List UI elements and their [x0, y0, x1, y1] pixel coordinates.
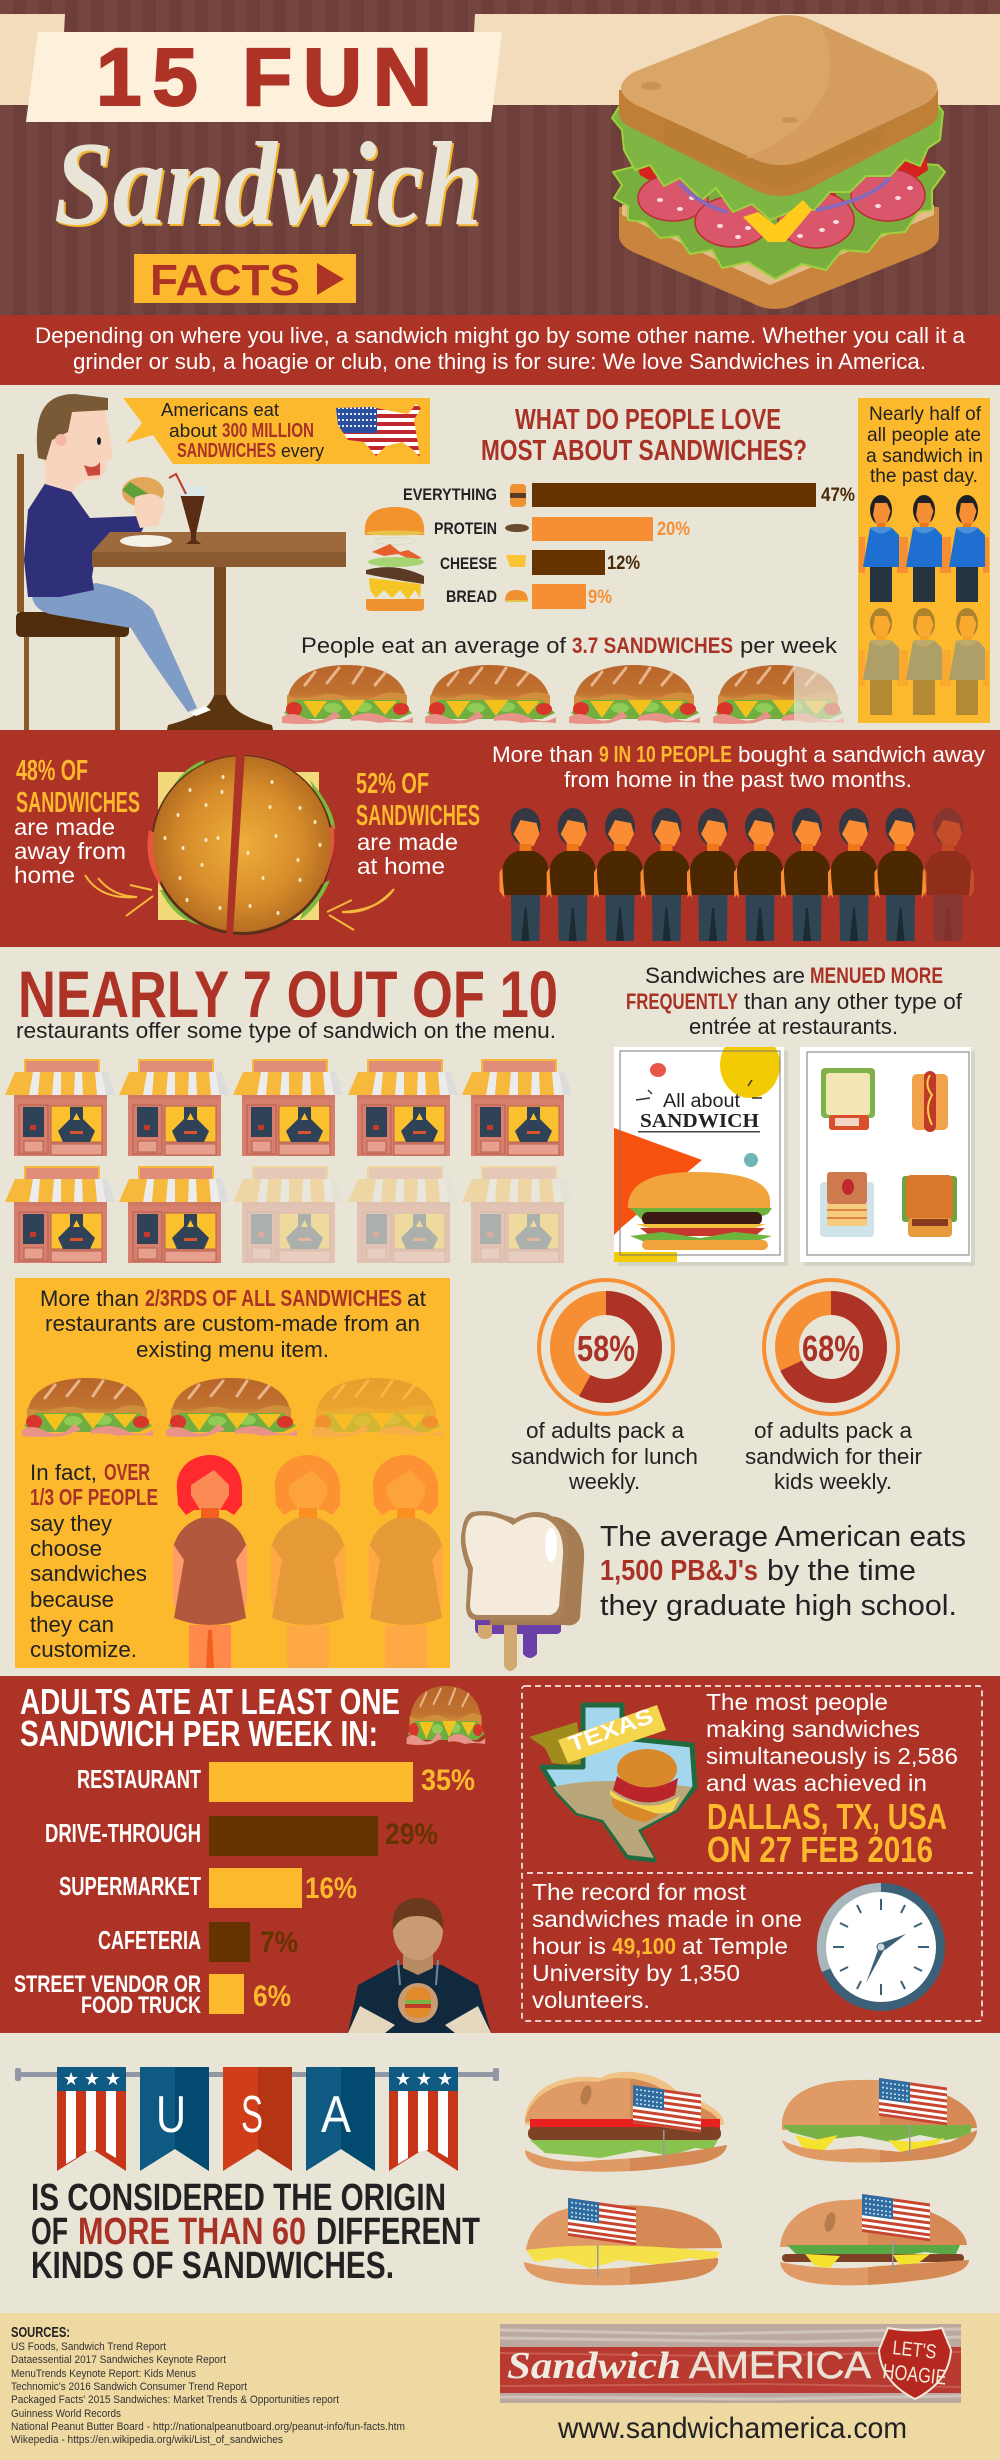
text: one third customize: 1/3 OF PEOPLE — [30, 1484, 158, 1510]
intro band: grinder or sub, a hoagie or club, one thing is for sure: We love Sandwiches in America. — [73, 349, 926, 374]
bar: cafeteria: 7% — [260, 1926, 298, 1959]
text: one third customize — [30, 1459, 158, 1662]
panel: nearly half of people — [858, 398, 990, 723]
caption: 68 percent: sandwich for their — [745, 1444, 922, 1469]
text: two thirds: at — [407, 1286, 427, 1311]
bar: everything: 47% — [821, 485, 855, 506]
text: most sandwiches record: volunteers. — [532, 1987, 650, 2013]
sources list: Packaged Facts' 2015 Sandwiches: Market Trends & Opportunities report — [11, 2394, 339, 2406]
icon: menu burger — [628, 1172, 772, 1250]
sources list: Guinness World Records — [11, 2408, 121, 2420]
illustration: man eating at table — [16, 394, 346, 735]
text: most sandwiches record — [532, 1879, 802, 2013]
text: one third customize: In fact, — [30, 1460, 97, 1485]
icon: big sandwich — [612, 15, 945, 309]
arrow: right — [327, 889, 394, 930]
icon: square sandwich — [821, 1068, 875, 1130]
caption: 58 percent: sandwich for lunch — [511, 1444, 698, 1469]
bar: cafeteria: CAFETERIA — [98, 1925, 201, 1955]
text: most sandwiches record: The record for most — [532, 1879, 747, 1905]
icon: flag burger three — [524, 2198, 722, 2285]
text: 52 percent home: are made — [357, 829, 458, 855]
text: origin of 60 sandwiches — [31, 2177, 480, 2287]
bar: restaurant: RESTAURANT — [77, 1764, 201, 1794]
text: one third customize: sandwiches — [30, 1561, 147, 1586]
bar: protein — [434, 517, 690, 541]
tomatoes — [632, 150, 928, 195]
pennant: stars left: ★★★ — [63, 2069, 121, 2089]
text: one third customize: they can — [30, 1612, 114, 1637]
sources list: US Foods, Sandwich Trend Report — [11, 2341, 166, 2353]
bar chart: what people love — [403, 483, 855, 609]
text: 3.7 sandwiches per week: 3.7 SANDWICHES — [572, 633, 733, 658]
text: 3.7 sandwiches per week — [301, 633, 838, 658]
menu card: cover — [614, 1032, 788, 1266]
icon: woman highlighted — [173, 1455, 247, 1668]
text: most sandwiches record: at Temple — [682, 1933, 788, 1959]
table top — [92, 532, 346, 567]
text: one third customize: say they — [30, 1511, 113, 1536]
pennant: stars right: ★★★ — [395, 2069, 453, 2089]
heading: adults ate — [20, 1681, 400, 1754]
text: two thirds: existing menu item. — [136, 1337, 329, 1362]
bar chart: places — [14, 1762, 475, 2019]
text: pbj fact — [600, 1521, 966, 1622]
text: pbj fact: by the time — [767, 1555, 916, 1587]
sources list: National Peanut Butter Board - http://nationalpeanutboard.org/peanut-info/fun-facts.htm — [11, 2421, 405, 2433]
burger in hand — [122, 477, 164, 507]
text: dallas date: ON 27 FEB 2016 — [707, 1829, 933, 1870]
text: 48 percent away: SANDWICHES — [16, 787, 140, 819]
text: 48 percent away: 48% OF — [16, 755, 88, 787]
icon: pbj toast — [461, 1511, 584, 1671]
icon: layered stack — [820, 1172, 874, 1237]
caption: 68 percent: kids weekly. — [774, 1469, 892, 1494]
icon: burger split — [147, 752, 335, 935]
bar: restaurant — [77, 1762, 475, 1802]
logo shield: LET'S — [891, 2337, 938, 2364]
bar: street vendor: FOOD TRUCK — [81, 1992, 202, 2019]
text: menued more frequently: entrée at restaurants. — [689, 1014, 898, 1039]
icon: exploded burger — [365, 507, 424, 611]
arrow: left — [85, 875, 153, 916]
bar: restaurant: 35% — [421, 1764, 475, 1797]
icon: texas badge: TEXAS — [565, 1703, 656, 1757]
icon: man holding burger — [348, 1898, 491, 2033]
panel: nearly half of people: a sandwich in — [866, 445, 983, 467]
header panel — [0, 0, 1000, 315]
text: most people record: The most people — [706, 1689, 888, 1715]
text: menued more frequently — [626, 963, 963, 1039]
text: most people record: and was achieved in — [706, 1770, 927, 1796]
pennant: stars left — [57, 2067, 126, 2171]
pennant: U: U — [156, 2086, 186, 2144]
text: origin of 60 sandwiches: OF — [31, 2211, 68, 2253]
sources list: Wikepedia - https://en.wikipedia.org/wiki/List_of_sandwiches — [11, 2434, 283, 2446]
title: sandwich: Sandwich — [56, 119, 484, 252]
caption: 58 percent: weekly. — [568, 1469, 640, 1494]
logo shield: HOAGIE — [881, 2360, 948, 2390]
logo: sandwich america — [500, 2324, 961, 2403]
text: origin of 60 sandwiches: MORE THAN 60 — [78, 2211, 306, 2253]
banner: usa bunting — [15, 2067, 499, 2171]
callout: 300 million sandwiches: Americans eat — [161, 399, 279, 420]
text: 48 percent away: away from — [14, 838, 126, 864]
faded people row — [859, 608, 989, 715]
facts tag: FACTS — [150, 256, 300, 305]
icons: nine of ten people — [500, 808, 974, 941]
torso — [24, 482, 145, 597]
text: menued more frequently: than any other type of — [744, 989, 963, 1014]
icon: us flag map — [336, 404, 421, 458]
table pedestal — [214, 567, 226, 700]
icon: flag burger one — [525, 2072, 727, 2172]
upper lettuce — [612, 105, 943, 220]
lower lettuce — [613, 150, 945, 279]
callout: 300 million sandwiches — [123, 398, 430, 464]
chair — [17, 454, 120, 733]
heading: what do people love: WHAT DO PEOPLE LOVE — [515, 404, 781, 436]
text: most sandwiches record: 49,100 — [612, 1933, 676, 1959]
caption: 68 percent — [745, 1418, 922, 1494]
title: 15 fun: 15 FUN — [96, 32, 432, 123]
heading: nearly 7 out of 10: restaurants offer some type of sandwich on the menu. — [16, 1018, 556, 1043]
pennant: U — [140, 2067, 209, 2171]
text: most sandwiches record: University by 1,350 — [532, 1960, 740, 1986]
text: menued more frequently: Sandwiches are — [645, 963, 805, 988]
heading: nearly 7 out of 10: NEARLY 7 OUT OF 10 — [18, 957, 558, 1031]
text: 52 percent home: 52% OF — [356, 768, 429, 800]
icons: subs two of three — [22, 1378, 442, 1437]
bar: drive through — [45, 1816, 438, 1856]
people row — [859, 495, 989, 602]
bar: everything — [403, 483, 855, 507]
heading: adults ate: ADULTS ATE AT LEAST ONE — [20, 1681, 400, 1722]
bar: bread — [446, 584, 612, 609]
icons: restaurants — [5, 1060, 572, 1263]
text: pbj fact: The average American eats — [600, 1521, 966, 1553]
head — [44, 405, 113, 492]
text: one third customize: OVER — [104, 1459, 150, 1485]
logo: sandwich america: AMERICA — [689, 2345, 872, 2387]
text: 52 percent home: SANDWICHES — [356, 800, 480, 832]
bar: cafeteria — [98, 1922, 298, 1962]
footer panel — [0, 2313, 1000, 2460]
legs — [32, 583, 197, 712]
menu card: cover: All about — [663, 1091, 741, 1112]
heading: adults ate: SANDWICH PER WEEK IN: — [20, 1713, 378, 1754]
text: 9 in 10 people — [492, 741, 985, 792]
bar: cheese: 12% — [607, 553, 640, 574]
sources list — [11, 2324, 405, 2446]
text: 3.7 sandwiches per week: per week — [740, 633, 838, 658]
text: menued more frequently: FREQUENTLY — [626, 989, 738, 1014]
bar: street vendor: STREET VENDOR OR — [14, 1971, 201, 1998]
icon: hot dog — [912, 1071, 948, 1132]
text: origin of 60 sandwiches: KINDS OF SANDWICHES. — [31, 2245, 394, 2287]
logo: sandwich america: Sandwich — [507, 2345, 681, 2387]
donut chart: 58 percent — [539, 1280, 673, 1414]
heading: what do people love: MOST ABOUT SANDWICHES? — [481, 435, 807, 467]
onion — [679, 178, 890, 212]
panel: nearly half of people: all people ate — [867, 424, 981, 446]
bar: supermarket: 16% — [305, 1872, 357, 1905]
text: menued more frequently: MENUED MORE — [810, 963, 943, 988]
bar: drive through: DRIVE-THROUGH — [45, 1818, 201, 1848]
text: 48 percent away: home — [14, 862, 75, 888]
bar: protein: 20% — [657, 519, 690, 540]
title box — [26, 32, 502, 122]
text: one third customize: because — [30, 1587, 114, 1612]
callout: 300 million sandwiches: about — [169, 420, 217, 441]
sources list: Technomic's 2016 Sandwich Consumer Trend Report — [11, 2381, 247, 2393]
text: two thirds: More than — [40, 1286, 139, 1311]
text: most people record: simultaneously is 2,586 — [706, 1743, 958, 1769]
icon: small sub — [407, 1686, 485, 1745]
caption: 58 percent: of adults pack a — [526, 1418, 684, 1443]
text: 9 in 10 people: 9 IN 10 PEOPLE — [599, 741, 732, 767]
icon: square burger — [902, 1175, 957, 1237]
menu card: cover: SANDWICH — [640, 1110, 759, 1132]
panel: custom made sandwiches — [15, 1278, 450, 1668]
callout: 300 million sandwiches: 300 MILLION — [222, 420, 314, 442]
text: 9 in 10 people: More than — [492, 742, 593, 767]
pennant: A — [306, 2067, 375, 2171]
text: two thirds — [40, 1285, 427, 1362]
top bread — [619, 90, 938, 196]
text: 52 percent home: at home — [357, 853, 445, 879]
dashed panel: records — [522, 1686, 982, 2021]
plate — [120, 535, 172, 547]
pennant: S — [223, 2067, 292, 2171]
bar: cheese: CHEESE — [440, 554, 497, 573]
text: origin of 60 sandwiches: DIFFERENT — [316, 2211, 480, 2253]
panel: made at home vs away — [0, 730, 1000, 947]
sources list: SOURCES: — [11, 2324, 70, 2341]
intro band: Depending on where you live, a sandwich might go by some other name. Whether you call it a — [35, 323, 965, 348]
bar: protein: PROTEIN — [434, 519, 497, 538]
text: most sandwiches record: hour is — [532, 1933, 606, 1959]
panel: nearly half of people: the past day. — [870, 465, 978, 487]
caption: 58 percent — [511, 1418, 698, 1494]
text: 48 percent away — [14, 755, 140, 888]
caption: 68 percent: of adults pack a — [754, 1418, 912, 1443]
donut chart: 58 percent: 58% — [577, 1328, 635, 1369]
bar: street vendor — [14, 1971, 291, 2019]
icon: flag burger four — [780, 2194, 969, 2285]
text: most sandwiches record: sandwiches made in one — [532, 1906, 802, 1932]
text: 3.7 sandwiches per week: People eat an average of — [301, 633, 567, 658]
bar: drive through: 29% — [385, 1818, 438, 1851]
bar: cheese — [440, 550, 640, 575]
icon: texas badge — [529, 1703, 695, 1860]
sources list: MenuTrends Keynote Report: Kids Menus — [11, 2368, 196, 2380]
icon: woman faded — [369, 1455, 443, 1668]
cream ribbon band — [0, 14, 1000, 105]
text: dallas date — [707, 1796, 947, 1870]
bar: supermarket: SUPERMARKET — [59, 1871, 201, 1901]
text: 9 in 10 people: from home in the past two months. — [564, 767, 912, 792]
pennant: A: A — [321, 2086, 351, 2144]
text: pbj fact: they graduate high school. — [600, 1590, 957, 1622]
website url: www.sandwichamerica.com — [557, 2412, 907, 2445]
bar: everything: EVERYTHING — [403, 485, 497, 504]
text: origin of 60 sandwiches: IS CONSIDERED THE ORIGIN — [31, 2177, 446, 2219]
icon: clock — [817, 1883, 945, 2011]
text: one third customize: choose — [30, 1536, 102, 1561]
pennant: S: S — [241, 2086, 263, 2144]
salami slices — [638, 169, 925, 248]
pennant: stars right — [389, 2067, 458, 2171]
bar: street vendor: 6% — [253, 1980, 291, 2013]
facts tag — [134, 254, 356, 305]
text: 52 percent home — [356, 768, 480, 879]
glass with straw — [180, 494, 205, 544]
heading: what do people love — [481, 404, 807, 467]
logo shield — [879, 2328, 951, 2399]
callout: 300 million sandwiches: SANDWICHES — [177, 440, 276, 462]
intro band — [0, 315, 1000, 385]
text: 48 percent away: are made — [14, 814, 115, 840]
panel: adults ate per week — [0, 1676, 1000, 2033]
title: sandwich: Sandwich — [54, 117, 482, 250]
icons: 3.7 subs — [282, 663, 848, 725]
callout: 300 million sandwiches: every — [281, 440, 325, 461]
donut chart: 68 percent: 68% — [802, 1328, 860, 1369]
text: two thirds: 2/3RDS OF ALL SANDWICHES — [145, 1285, 402, 1311]
donut chart: 68 percent — [764, 1280, 898, 1414]
bar: bread: BREAD — [446, 587, 497, 606]
text: two thirds: restaurants are custom-made from an — [45, 1311, 420, 1336]
text: most people record — [706, 1689, 958, 1796]
text: 9 in 10 people: bought a sandwich away — [738, 742, 985, 767]
cheese — [743, 200, 812, 242]
text: pbj fact: 1,500 PB&J's — [600, 1555, 758, 1587]
bar: bread: 9% — [588, 587, 612, 608]
bar: supermarket — [59, 1868, 357, 1908]
sources list: Dataessential 2017 Sandwiches Keynote Report — [11, 2354, 226, 2366]
text: one third customize: customize. — [30, 1637, 137, 1662]
icon: flag burger two — [782, 2078, 977, 2162]
menu card: items — [800, 1047, 975, 1266]
text: most people record: making sandwiches — [706, 1716, 920, 1742]
icon: woman faded — [271, 1455, 345, 1668]
panel: nearly half of people: Nearly half of — [869, 403, 982, 425]
